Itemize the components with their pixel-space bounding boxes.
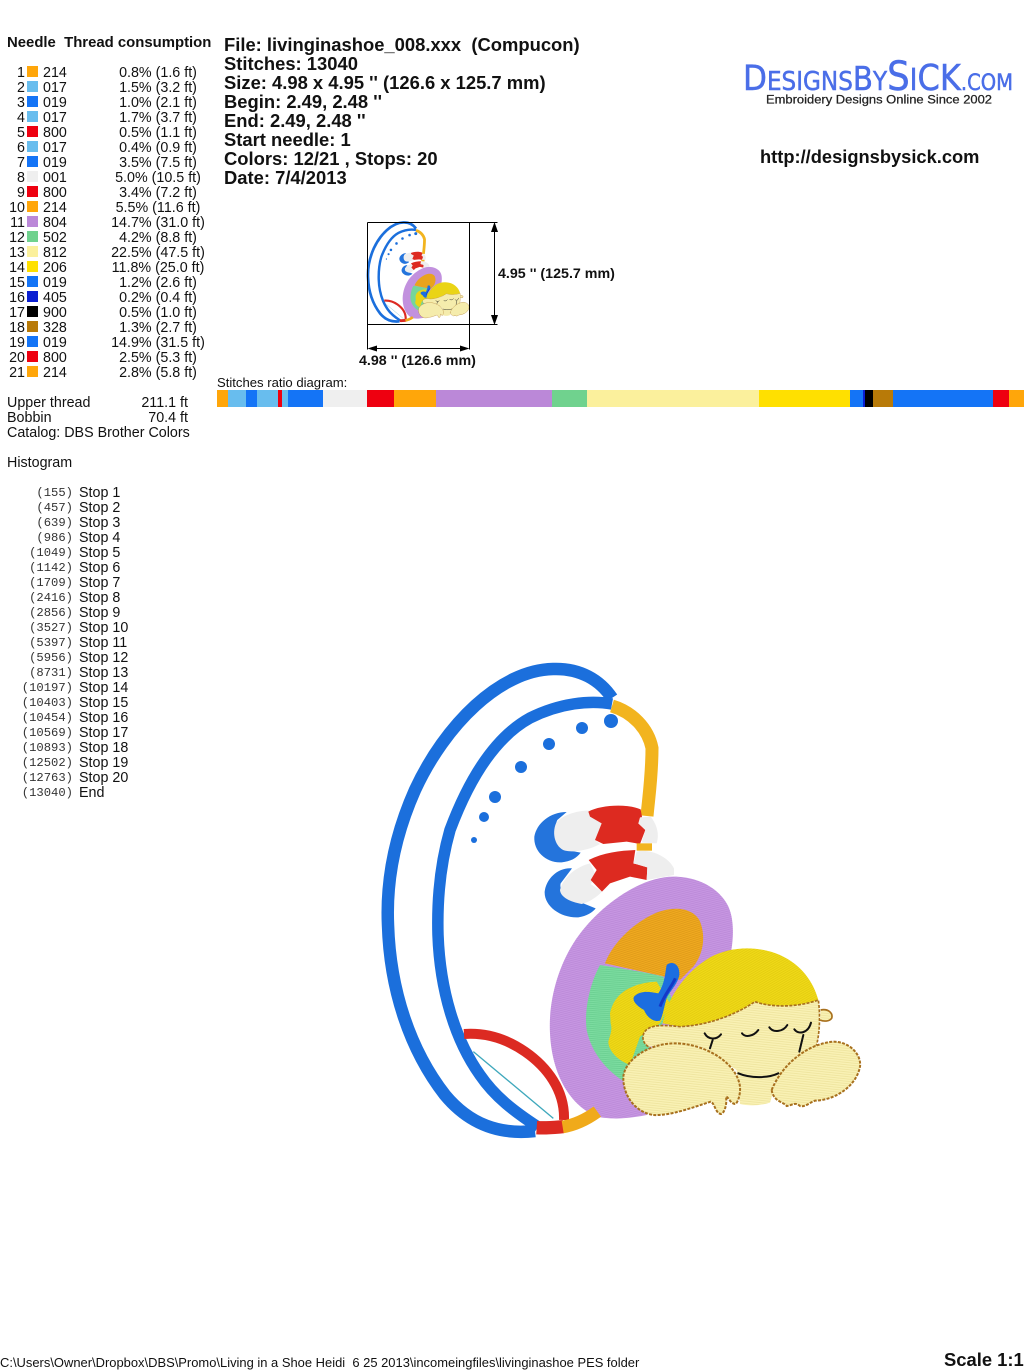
histogram stop list: Stop 8 xyxy=(79,590,120,606)
histogram stop list: Stop 9 xyxy=(79,605,120,621)
logo: DesignsBySick.com: DESIGNSBYSICK.COM xyxy=(743,54,1013,100)
needle thread table: 5 xyxy=(17,125,25,141)
needle thread table: 2.8% (5.8 ft) xyxy=(119,365,197,381)
file information block xyxy=(224,34,580,188)
needle thread table: 405 xyxy=(43,290,67,306)
histogram stop list: Stop 19 xyxy=(79,755,128,771)
histogram stop list: End xyxy=(79,785,104,801)
needle thread table: 800 xyxy=(43,350,67,366)
histogram stop list: (2416) xyxy=(29,591,73,605)
histogram stop list: (155) xyxy=(36,486,73,500)
needle thread table: 21 xyxy=(9,365,25,381)
needle thread table: 206 xyxy=(43,260,67,276)
needle thread table: 804 xyxy=(43,215,67,231)
dimension arrowheads xyxy=(368,222,498,352)
needle thread table: 0.5% (1.1 ft) xyxy=(119,125,197,141)
dimension lines xyxy=(368,222,498,350)
needle thread table: 800 xyxy=(43,125,67,141)
needle thread table: 019 xyxy=(43,275,67,291)
needle thread table: 017 xyxy=(43,140,67,156)
needle thread table: 1.3% (2.7 ft) xyxy=(119,320,197,336)
needle thread table: 3.5% (7.5 ft) xyxy=(119,155,197,171)
histogram stop list: (10454) xyxy=(22,711,73,725)
needle thread table: 900 xyxy=(43,305,67,321)
facial features xyxy=(705,1023,811,1077)
histogram stop list: Stop 17 xyxy=(79,725,128,741)
file information block: File: livinginashoe_008.xxx (Compucon) xyxy=(224,34,580,55)
needle thread table: 4 xyxy=(17,110,25,126)
needle thread table: 019 xyxy=(43,155,67,171)
needle thread table: 0.2% (0.4 ft) xyxy=(119,290,197,306)
needle thread table: 1 xyxy=(17,65,25,81)
histogram stop list: (1049) xyxy=(29,546,73,560)
needle thread table: 3 xyxy=(17,95,25,111)
histogram stop list: Stop 5 xyxy=(79,545,120,561)
needle thread table: 214 xyxy=(43,65,67,81)
file information block: Begin: 2.49, 2.48 '' xyxy=(224,91,382,112)
needle thread table: 328 xyxy=(43,320,67,336)
thumbnail design xyxy=(368,222,469,322)
needle thread table: 0.8% (1.6 ft) xyxy=(119,65,197,81)
needle thread table: 1.5% (3.2 ft) xyxy=(119,80,197,96)
needle thread table: 16 xyxy=(9,290,25,306)
histogram stop list: (10569) xyxy=(22,726,73,740)
needle thread table: 1.0% (2.1 ft) xyxy=(119,95,197,111)
needle thread table: 214 xyxy=(43,365,67,381)
needle thread table: 20 xyxy=(9,350,25,366)
file information block: End: 2.49, 2.48 '' xyxy=(224,110,366,131)
needle thread table: 10 xyxy=(9,200,25,216)
needle thread table: 8 xyxy=(17,170,25,186)
needle thread table: 14.7% (31.0 ft) xyxy=(111,215,205,231)
needle thread table: 15 xyxy=(9,275,25,291)
histogram stop list: (5956) xyxy=(29,651,73,665)
needle thread table: 14 xyxy=(9,260,25,276)
orange insole xyxy=(605,909,703,980)
needle thread table: 9 xyxy=(17,185,25,201)
needle thread table xyxy=(9,65,205,381)
needle thread table: 1.2% (2.6 ft) xyxy=(119,275,197,291)
needle thread table: 0.5% (1.0 ft) xyxy=(119,305,197,321)
histogram stop list: Stop 4 xyxy=(79,530,120,546)
histogram stop list: (8731) xyxy=(29,666,73,680)
histogram stop list: (1142) xyxy=(29,561,73,575)
histogram stop list: (10403) xyxy=(22,696,73,710)
histogram stop list: Stop 2 xyxy=(79,500,120,516)
histogram stop list: Stop 1 xyxy=(79,485,120,501)
histogram stop list: (10197) xyxy=(22,681,73,695)
sleeping girl in shoe xyxy=(550,877,860,1118)
histogram stop list: Stop 16 xyxy=(79,710,128,726)
thread totals xyxy=(7,395,190,441)
needle thread table: 502 xyxy=(43,230,67,246)
needle thread table: 017 xyxy=(43,80,67,96)
file information block: Date: 7/4/2013 xyxy=(224,167,347,188)
needle thread table: 18 xyxy=(9,320,25,336)
histogram stop list: (13040) xyxy=(22,786,73,800)
histogram stop list: (986) xyxy=(36,531,73,545)
needle thread table: 2.5% (5.3 ft) xyxy=(119,350,197,366)
thumbnail preview with dimensions xyxy=(366,221,498,352)
histogram stop list: Stop 6 xyxy=(79,560,120,576)
thread totals: 211.1 ft xyxy=(141,395,188,411)
needle thread table: 812 xyxy=(43,245,67,261)
needle thread table: 6 xyxy=(17,140,25,156)
blue outer and inner hoop xyxy=(388,669,612,1132)
needle thread table: 800 xyxy=(43,185,67,201)
histogram stop list: (5397) xyxy=(29,636,73,650)
needle thread table: 3.4% (7.2 ft) xyxy=(119,185,197,201)
face xyxy=(643,1000,820,1105)
histogram stop list: Stop 10 xyxy=(79,620,128,636)
histogram stop list: (12502) xyxy=(22,756,73,770)
stitches ratio bar xyxy=(217,390,1024,407)
histogram stop list: Stop 12 xyxy=(79,650,128,666)
histogram stop list: (2856) xyxy=(29,606,73,620)
needle thread table: 017 xyxy=(43,110,67,126)
needle thread table: 4.2% (8.8 ft) xyxy=(119,230,197,246)
needle thread table: 13 xyxy=(9,245,25,261)
front hair xyxy=(663,948,818,1027)
needle thread table: 17 xyxy=(9,305,25,321)
histogram stop list: (3527) xyxy=(29,621,73,635)
blue dots xyxy=(471,714,618,843)
histogram heading: Histogram xyxy=(7,455,72,471)
file information block: Colors: 12/21 , Stops: 20 xyxy=(224,148,438,169)
histogram stop list: Stop 13 xyxy=(79,665,128,681)
scale label: Scale 1:1 xyxy=(944,1349,1024,1370)
histogram stop list: (457) xyxy=(36,501,73,515)
thread totals: Bobbin xyxy=(7,410,52,426)
needle thread table: 5.0% (10.5 ft) xyxy=(115,170,201,186)
histogram stop list: (12763) xyxy=(22,771,73,785)
needle thread table: 019 xyxy=(43,335,67,351)
orange connector xyxy=(612,706,652,816)
needle thread table: 001 xyxy=(43,170,67,186)
needle thread table: 12 xyxy=(9,230,25,246)
thread totals: Upper thread xyxy=(7,395,90,411)
histogram stop list: Stop 11 xyxy=(79,635,127,651)
file path footer: C:\Users\Owner\Dropbox\DBS\Promo\Living in a Shoe Heidi 6 25 2013\incomeingfiles\livinginashoe PES folder xyxy=(0,1355,639,1370)
needle thread table: 2 xyxy=(17,80,25,96)
needle thread table: 22.5% (47.5 ft) xyxy=(111,245,205,261)
histogram stop list: (10893) xyxy=(22,741,73,755)
histogram stop list: Stop 7 xyxy=(79,575,120,591)
histogram stop list: (639) xyxy=(36,516,73,530)
histogram stop list xyxy=(22,485,128,801)
stitches ratio label: Stitches ratio diagram: xyxy=(217,375,347,390)
histogram stop list: Stop 3 xyxy=(79,515,120,531)
blue bow xyxy=(634,963,679,1021)
needle thread table: 0.4% (0.9 ft) xyxy=(119,140,197,156)
needle table header: Needle Thread consumption xyxy=(7,35,211,51)
needle thread table: 7 xyxy=(17,155,25,171)
histogram stop list: Stop 14 xyxy=(79,680,128,696)
histogram stop list: Stop 15 xyxy=(79,695,128,711)
needle thread table: 1.7% (3.7 ft) xyxy=(119,110,197,126)
height label: 4.95 '' (125.7 mm) xyxy=(498,266,615,282)
ear xyxy=(820,1010,832,1021)
thread totals: Catalog: DBS Brother Colors xyxy=(7,425,190,441)
red ring and toe cap xyxy=(464,1034,597,1128)
file information block: Size: 4.98 x 4.95 '' (126.6 x 125.7 mm) xyxy=(224,72,546,93)
thread totals: 70.4 ft xyxy=(148,410,188,426)
slippers xyxy=(534,806,674,917)
histogram stop list: Stop 18 xyxy=(79,740,128,756)
green lining xyxy=(586,965,673,1081)
logo: DesignsBySick.com: Embroidery Designs Online Since 2002 xyxy=(766,92,992,106)
left arm xyxy=(623,1043,740,1115)
needle thread table: 019 xyxy=(43,95,67,111)
needle thread table: 19 xyxy=(9,335,25,351)
needle thread table: 11.8% (25.0 ft) xyxy=(112,260,204,276)
right arm xyxy=(772,1042,860,1106)
needle thread table: 11 xyxy=(10,215,25,231)
histogram stop list: Stop 20 xyxy=(79,770,128,786)
needle thread table: 5.5% (11.6 ft) xyxy=(116,200,200,216)
file information block: Stitches: 13040 xyxy=(224,53,358,74)
needle thread table: 214 xyxy=(43,200,67,216)
website url: http://designsbysick.com xyxy=(760,146,979,167)
needle thread table: 14.9% (31.5 ft) xyxy=(111,335,205,351)
histogram stop list: (1709) xyxy=(29,576,73,590)
back hair xyxy=(608,982,670,1065)
width label: 4.98 '' (126.6 mm) xyxy=(359,353,476,369)
purple shoe xyxy=(550,877,733,1118)
file information block: Start needle: 1 xyxy=(224,129,351,150)
